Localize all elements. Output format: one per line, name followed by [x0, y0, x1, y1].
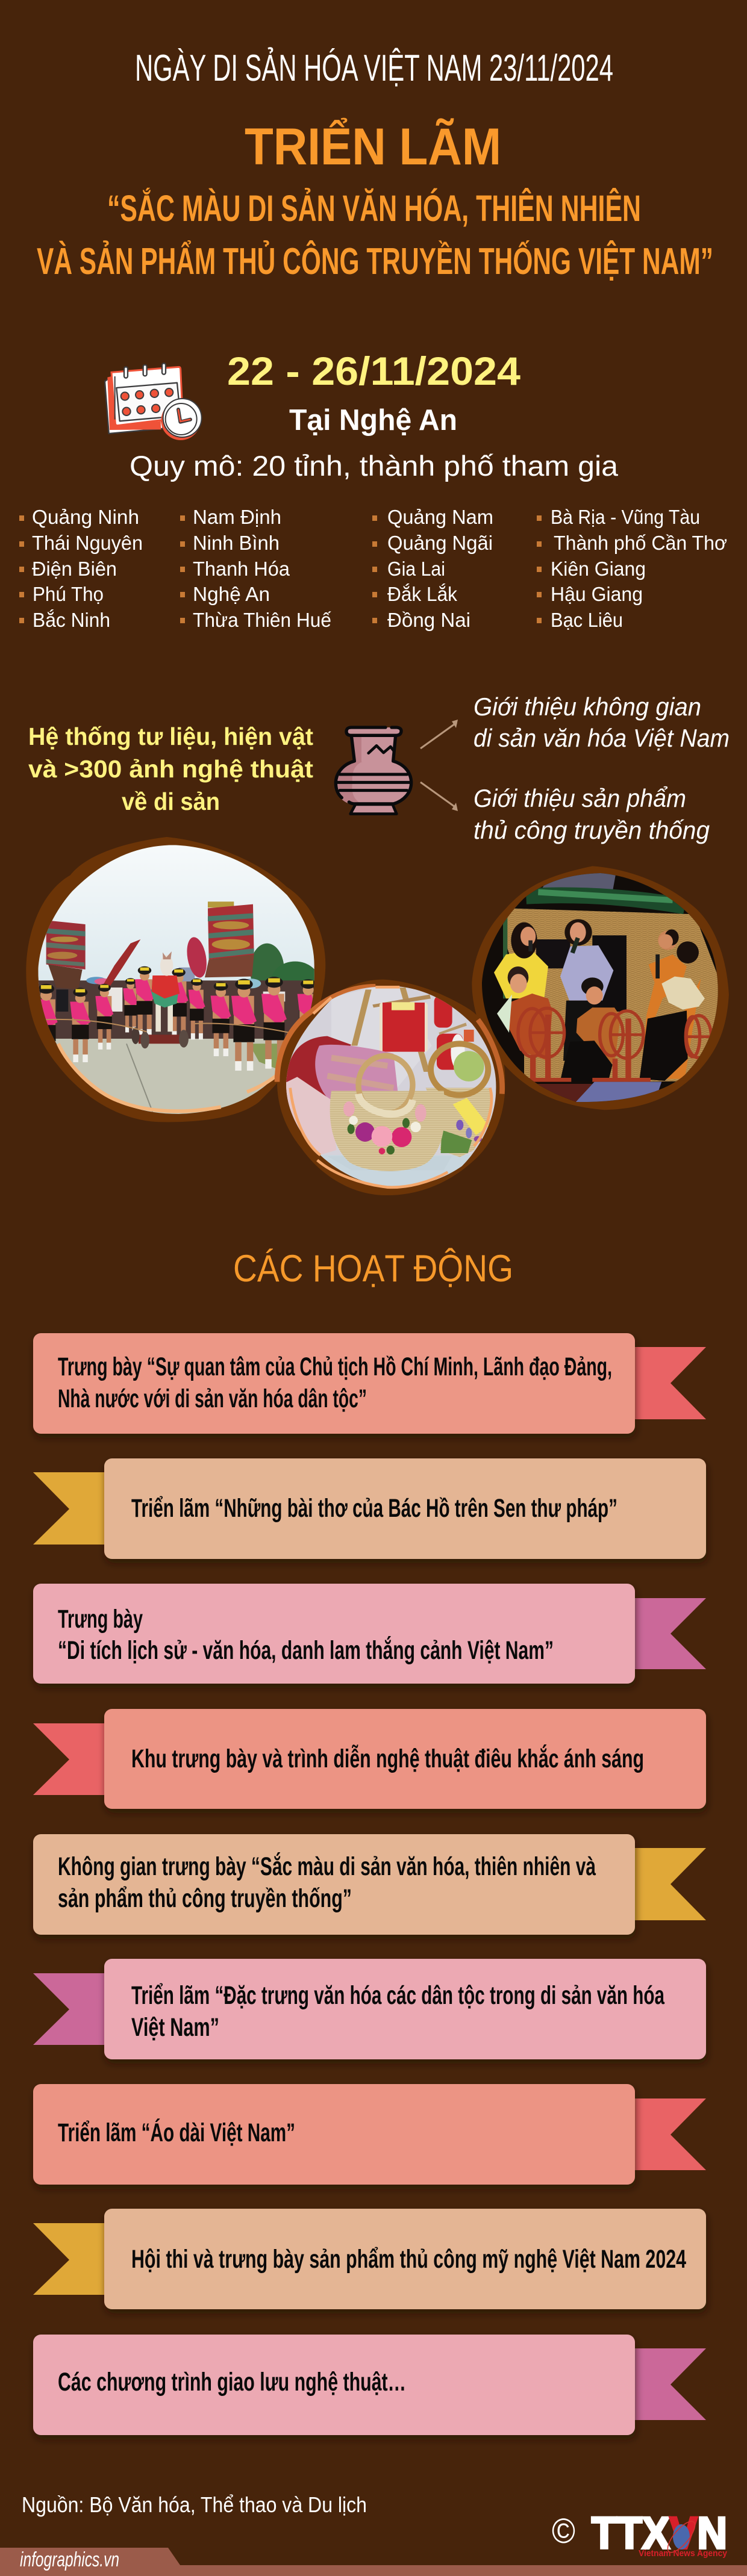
singer: orange blouse — [640, 929, 705, 1081]
text: heritage space — [474, 692, 730, 752]
list: participating provinces column 3: Đắk Lắk — [387, 583, 457, 605]
text: heritage space: Giới thiệu không gian — [474, 692, 701, 721]
list: participating provinces column 1: Thái Nguyên — [32, 532, 143, 554]
list: participating provinces column 3: Gia Lai — [387, 558, 445, 580]
list: participating provinces column 3: Quảng Nam — [387, 506, 493, 528]
list: participating provinces column 1: Quảng Ninh — [32, 506, 139, 528]
photo: traditional performers — [472, 866, 729, 1110]
back bag — [426, 1044, 491, 1157]
activity card 6 — [33, 1959, 706, 2059]
icon: clay vase — [336, 727, 411, 814]
list: participating provinces column 4: Bạc Liêu — [551, 609, 623, 631]
activity card 3: “Di tích lịch sử - văn hóa, danh lam thắng cảnh Việt Nam” — [58, 1635, 554, 1665]
pink cylinder — [286, 1036, 398, 1100]
activity card 9 — [33, 2335, 706, 2435]
list: participating provinces column 4: Kiên Giang — [551, 558, 646, 580]
heading: activities: CÁC HOẠT ĐỘNG — [233, 1248, 513, 1290]
copyright symbol: © — [552, 2512, 575, 2551]
activity card 3 — [33, 1584, 706, 1684]
photo: festival parade — [26, 837, 325, 1122]
activity card 5 — [33, 1834, 706, 1935]
text: craft products: Giới thiệu sản phẩm — [474, 784, 686, 812]
drums — [380, 995, 467, 1070]
activity card 1: Nhà nước với di sản văn hóa dân tộc” — [58, 1384, 367, 1413]
list: participating provinces column 1: Bắc Ninh — [33, 609, 110, 631]
activity card 5: sản phẩm thủ công truyền thống” — [58, 1884, 352, 1913]
icon: calendar with clock — [105, 363, 202, 440]
photo: handicraft bags and drums — [277, 980, 505, 1195]
activity card 3: Trưng bày — [58, 1605, 143, 1634]
title: main word: TRIỂN LÃM — [245, 118, 501, 176]
activity card 8 — [33, 2209, 706, 2309]
footer band — [0, 2548, 747, 2576]
list: participating provinces column 2 — [180, 506, 331, 631]
logo: TTXVN: Vietnam News Agency — [639, 2548, 728, 2559]
callout: documents and artworks — [28, 723, 313, 815]
list: participating provinces column 4: Thành phố Cần Thơ — [554, 532, 727, 554]
activity card 4 — [33, 1709, 706, 1809]
right banner — [205, 901, 254, 977]
date: 22 - 26/11/2024 — [227, 349, 520, 393]
front bag — [330, 1056, 445, 1171]
text: heritage space: di sản văn hóa Việt Nam — [474, 724, 730, 752]
list: participating provinces column 3: Đồng Nai — [387, 609, 470, 631]
arrow: to heritage space — [420, 720, 458, 748]
activity card 9: Các chương trình giao lưu nghệ thuật… — [58, 2368, 406, 2397]
callout: documents and artworks: và >300 ảnh nghệ thuật — [28, 755, 313, 783]
activity card 7: Triển lãm “Áo dài Việt Nam” — [58, 2118, 295, 2147]
activity card 2 — [33, 1458, 706, 1559]
list: participating provinces column 3 — [372, 506, 493, 631]
list: participating provinces column 4: Bà Rịa - Vũng Tàu — [551, 506, 700, 528]
people — [39, 984, 58, 1042]
list: participating provinces column 2: Ninh Bình — [193, 532, 280, 554]
list: participating provinces column 1: Phú Thọ — [33, 583, 104, 605]
list: participating provinces column 3: Quảng Ngãi — [387, 532, 493, 554]
arrow: to craft products — [420, 782, 458, 811]
footer website: infographics.vn — [20, 2548, 119, 2571]
text: craft products: thủ công truyền thống — [474, 816, 710, 844]
list: participating provinces column 2: Nam Định — [193, 506, 281, 528]
singer: lavender blouse — [560, 919, 613, 1061]
list: participating provinces column 4: Hậu Giang — [551, 583, 643, 605]
activity card 7 — [33, 2084, 706, 2185]
location: Tại Nghệ An — [289, 404, 457, 437]
singer: yellow dress — [494, 922, 548, 998]
title — [37, 118, 713, 282]
text: craft products — [474, 784, 710, 844]
left banner — [46, 920, 86, 989]
horse and cart — [131, 951, 189, 1048]
callout: documents and artworks: về di sản — [122, 788, 220, 815]
list: participating provinces column 2: Nghệ An — [193, 583, 270, 605]
seated women with spinning wheels — [497, 966, 711, 1082]
list: participating provinces column 2: Thanh Hóa — [193, 558, 290, 580]
activity card 6: Việt Nam” — [131, 2013, 219, 2042]
logo: TTXVN: TTXVN — [592, 2508, 727, 2558]
list: participating provinces column 1: Điện Biên — [32, 558, 117, 580]
source: Nguồn: Bộ Văn hóa, Thể thao và Du lịch — [22, 2492, 367, 2517]
scale of the exhibition: Quy mô: 20 tỉnh, thành phố tham gia — [130, 450, 619, 482]
activity card 1 — [33, 1333, 706, 1434]
callout: documents and artworks: Hệ thống tư liệu, hiện vật — [28, 723, 313, 750]
list: participating provinces column 1 — [19, 506, 143, 631]
list: participating provinces column 4 — [537, 506, 727, 631]
list: participating provinces column 2: Thừa Thiên Huế — [193, 609, 331, 631]
